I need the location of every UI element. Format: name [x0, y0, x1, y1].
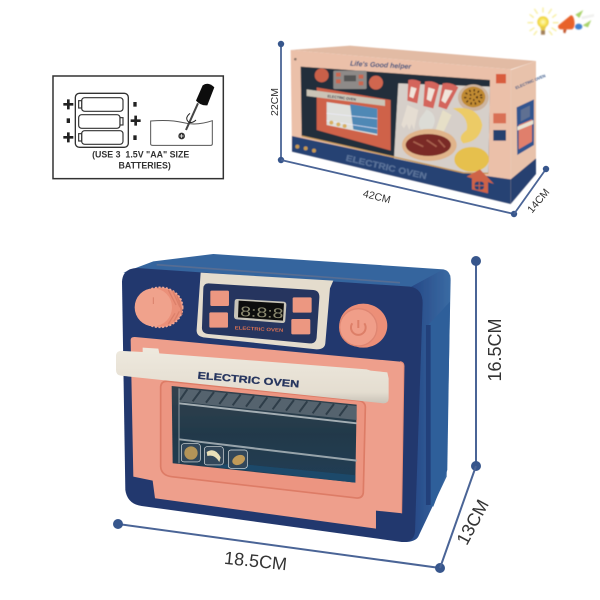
- cookie: [458, 84, 489, 111]
- dimension: box height 22CM: 22CM: [269, 88, 281, 116]
- panel label: ELECTRIC OVEN: [235, 325, 284, 334]
- panel: battery instructions: [53, 76, 223, 179]
- plate of food: [402, 84, 489, 172]
- dimension: oven depth 13CM: [440, 466, 493, 568]
- door: [131, 337, 404, 529]
- icon: megaphone: [558, 10, 594, 33]
- oven front: [122, 268, 423, 542]
- handle: [116, 348, 389, 403]
- box badges: [493, 74, 506, 141]
- oven window: [172, 386, 357, 483]
- box top: [291, 46, 536, 69]
- product box photo: e: [294, 57, 297, 63]
- product box photo: ELECTRIC OVEN: [514, 73, 546, 90]
- mini oven: ELECTRIC OVEN: [327, 94, 356, 102]
- dimension: box depth 14CM: 14CM: [525, 186, 552, 216]
- dimension: oven width 18.5CM: [113, 519, 445, 574]
- dimension: box depth 14CM: [514, 166, 552, 216]
- oven top: [123, 254, 451, 295]
- right power knob: [339, 304, 387, 348]
- left knob: [135, 287, 183, 327]
- corner icons: light and sound: [528, 8, 594, 35]
- side panel oven picture: [517, 99, 534, 155]
- oven right side: [402, 269, 451, 542]
- icon: battery holder: [63, 93, 141, 147]
- oven product photo: [116, 254, 451, 542]
- box product name: ELECTRIC OVEN: [345, 153, 428, 181]
- handle: ELECTRIC OVEN: [197, 371, 300, 391]
- dimension: oven height 16.5CM: [471, 256, 505, 471]
- battery caption: [92, 150, 189, 170]
- mini oven: [307, 68, 391, 151]
- dimension: oven height 16.5CM: 16.5CM: [485, 318, 505, 382]
- dimension: box width 42CM: [281, 160, 517, 217]
- box slogan: Life's Good helper: [350, 61, 412, 71]
- utensils: [401, 79, 458, 134]
- battery caption: (USE 3 1.5V "AA" SIZE: [92, 150, 189, 160]
- dimension: box height 22CM: [269, 41, 284, 163]
- dimension: oven depth 13CM: 13CM: [453, 496, 493, 548]
- digital display: 8:8:8: [240, 303, 284, 321]
- product box photo: [291, 46, 546, 204]
- battery caption: BATTERIES): [118, 160, 171, 170]
- control panel: [197, 273, 333, 349]
- buttons: [209, 291, 312, 334]
- icon: screwdriver and cover: [151, 84, 214, 145]
- icon: light bulb: [528, 8, 558, 35]
- food icons: [181, 444, 247, 468]
- box window: [301, 67, 490, 173]
- dimension: oven width 18.5CM: 18.5CM: [223, 548, 288, 574]
- box front: [291, 50, 511, 204]
- box front blue band: [292, 136, 511, 204]
- icon: house logo: [467, 169, 494, 193]
- dimension: box width 42CM: 42CM: [362, 188, 392, 206]
- band icons: [295, 145, 316, 153]
- box side panel: [511, 61, 536, 204]
